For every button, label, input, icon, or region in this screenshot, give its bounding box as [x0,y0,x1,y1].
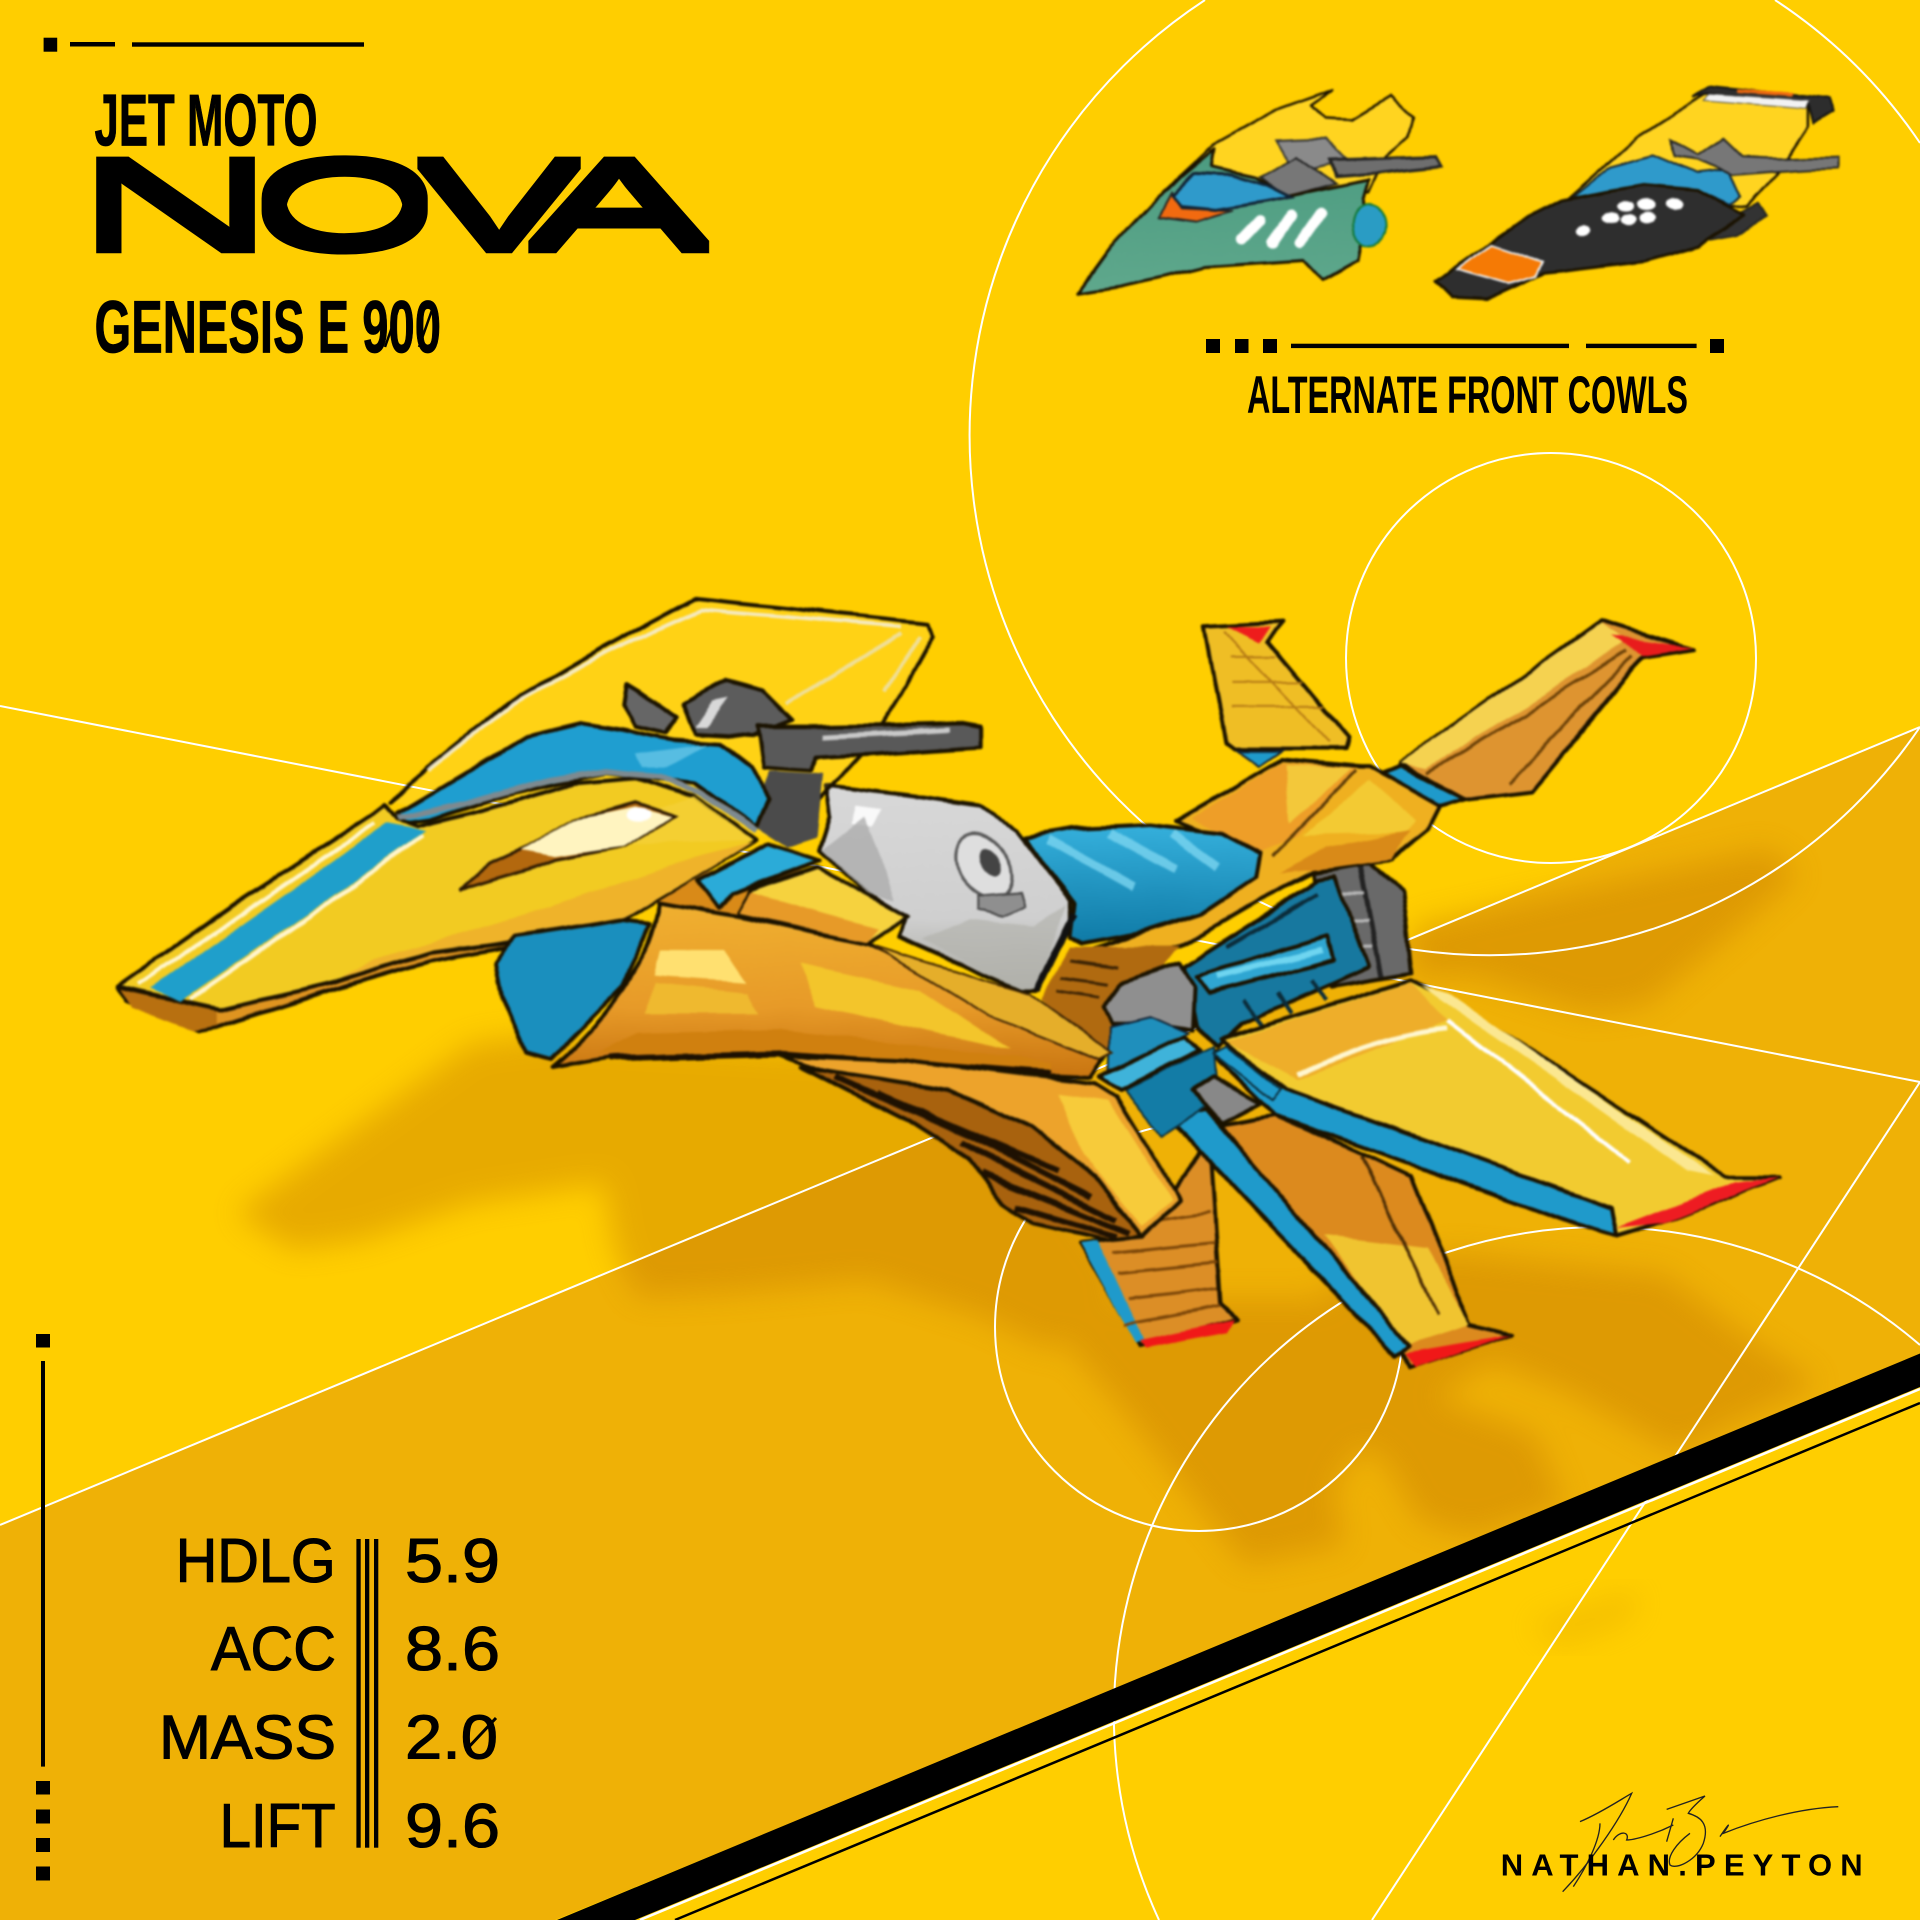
nose cowl [117,778,756,1010]
hull underlay [649,857,882,931]
black diagonal stripe [557,1354,1920,1920]
stat: handling [176,1526,500,1596]
stats table [159,1526,500,1861]
stat: lift: LIFT [220,1791,336,1861]
author name: NATHAN.PEYTON [1501,1848,1863,1882]
blue stripe [151,823,426,1002]
main illustration: hover bike [117,598,1779,1368]
title: nova: A [528,136,709,274]
stat: acceleration: ACC [211,1614,336,1684]
stat: acceleration: 8.6 [405,1614,500,1684]
windshield [393,598,933,837]
hull [552,857,1113,1077]
gold trim below tank [873,945,1113,1060]
stats frame [36,1334,50,1880]
rear fins [1080,621,1693,1348]
stat: acceleration [211,1614,500,1684]
engine group [820,760,1440,1077]
front section [117,598,981,1060]
belly [780,1055,1180,1240]
intake [496,920,650,1060]
alternate cowl: green [1077,89,1440,293]
stat: mass [159,1702,498,1772]
alternate cowl: black and orange [1435,86,1838,300]
stat: mass: MASS [159,1702,336,1772]
title: jet moto: JET MOTO [94,80,318,162]
cowls divider [1206,339,1724,353]
fan [1315,863,1411,987]
stat: lift: 9.6 [405,1791,500,1861]
stat divider [356,1539,378,1848]
collar [699,843,820,908]
stat: lift [220,1791,500,1861]
hatched wedge [1041,947,1180,1060]
main wing [1221,980,1779,1235]
rear body [1075,760,1440,957]
subtitle: genesis e 900: GENESIS E 900 [94,286,441,368]
silver tank [820,787,1070,990]
dark frame [750,770,823,847]
title: nova [74,136,709,274]
blue tube [1197,937,1333,993]
wings [1167,980,1779,1368]
struts and clamp [1100,1037,1281,1137]
stat: handling: 5.9 [405,1526,500,1596]
signature scribble [1563,1793,1838,1892]
cowl window [460,803,675,890]
upper right fin [1400,621,1693,799]
main tube [552,903,1108,1077]
ground plane [0,727,1920,1920]
cowl trim [399,772,756,830]
ship cast shadows [236,849,1818,1565]
lower wing [1221,1116,1511,1368]
flap [738,867,908,943]
lower yellow corner [635,1387,1920,1920]
title: nova: O [251,137,438,274]
tube highlights [598,950,1050,1077]
blue cockpit [399,723,769,827]
faint shadow beyond stripe [1530,1590,1640,1645]
intake pod [1104,963,1195,1030]
stat: mass: 2.0 [405,1702,498,1772]
subtitle: genesis e 900 [94,286,441,368]
vertical stabilizer [1205,622,1348,749]
stat: handling: HDLG [176,1526,336,1596]
title: nova: N [74,136,277,273]
far lower fin [1080,1141,1237,1345]
header decoration [44,38,364,52]
title: nova: V [417,137,581,274]
blue seat [1024,825,1260,943]
handlebar [623,683,678,733]
blue engine [1184,877,1369,1047]
